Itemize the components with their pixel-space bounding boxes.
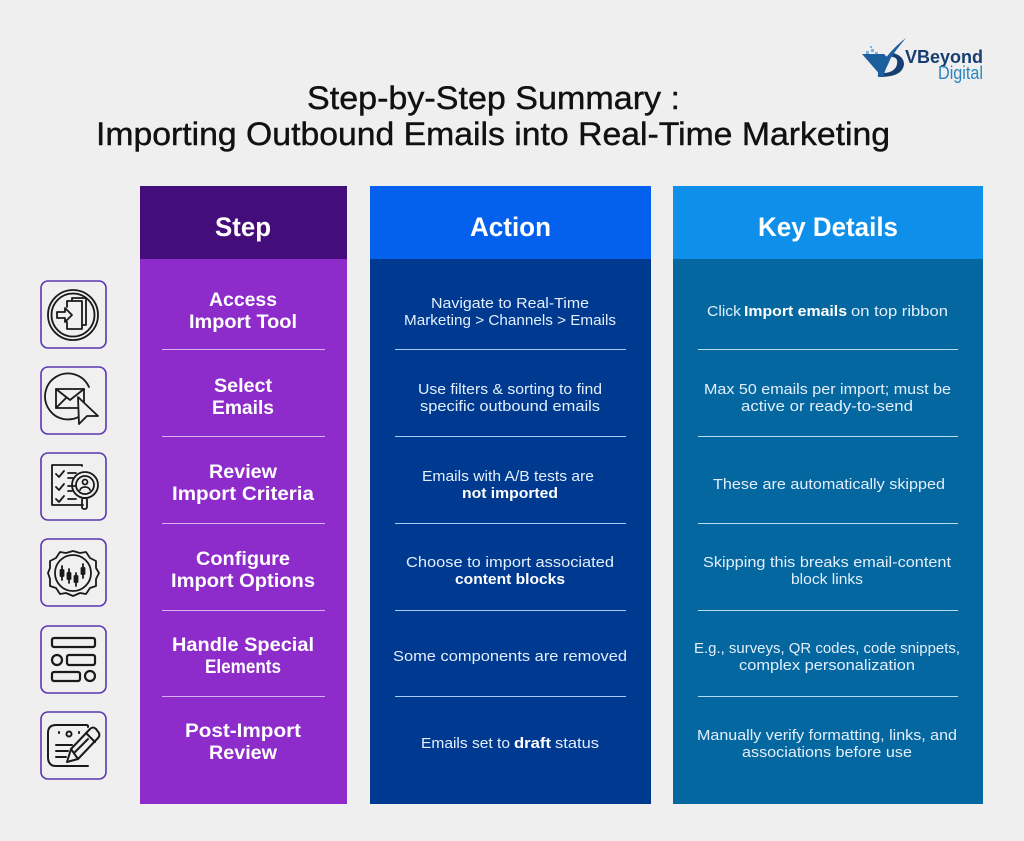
action: content blocks: content blocks [455, 571, 565, 588]
heading: step [140, 186, 347, 259]
step: post-import review: Review [209, 743, 277, 764]
heading: step: Step [215, 212, 271, 242]
detail: import emails: Import emails [744, 303, 847, 320]
action: filters [418, 381, 602, 415]
logo: VBeyond Digital: VBeyond [905, 47, 983, 67]
action: a/b tests: Emails with A/B tests are [422, 468, 594, 485]
icon: post-import note and pencil [41, 712, 106, 779]
detail: breaks links [703, 554, 952, 588]
detail: verify [697, 727, 957, 761]
step: handle special elements: Elements [205, 657, 281, 678]
panel: action column [370, 186, 651, 804]
step: review import criteria: Import Criteria [172, 484, 314, 505]
logo: VBeyond Digital: Digital [938, 63, 983, 83]
detail: import emails [707, 303, 948, 320]
detail: import emails: on top ribbon [851, 303, 948, 320]
detail: special elements: E.g., surveys, QR codes, code snippets, [694, 640, 960, 657]
logo: VBeyond Digital [862, 38, 983, 83]
step: select emails: Emails [212, 398, 274, 419]
step: post-import review: Post-Import [185, 721, 302, 742]
action: draft status: draft [514, 735, 551, 752]
icon: special elements layout [41, 626, 106, 693]
step: access import tool: Access [209, 290, 277, 311]
detail: special elements [694, 640, 960, 674]
step: access import tool: Import Tool [189, 312, 297, 333]
panel: step column [140, 186, 347, 804]
step: access import tool [189, 290, 297, 333]
action: filters: Use filters & sorting to find [418, 381, 602, 398]
detail: max 50 emails: active or ready-to-send [741, 398, 913, 415]
detail: max 50 emails: Max 50 emails per import; must be [704, 381, 951, 398]
step: configure import options: Configure [196, 549, 290, 570]
detail: breaks links: block links [791, 571, 863, 588]
icon: email cursor [41, 367, 106, 434]
action: content blocks [406, 554, 614, 588]
detail: breaks links: Skipping this breaks email-content [703, 554, 952, 571]
action: content blocks: Choose to import associated [406, 554, 614, 571]
detail: max 50 emails [704, 381, 951, 415]
step: configure import options [171, 549, 315, 592]
step: review import criteria [172, 462, 314, 505]
step: handle special elements [172, 635, 314, 678]
heading: key details [673, 186, 983, 259]
heading: key details: Key Details [758, 212, 898, 242]
action: filters: specific outbound emails [420, 398, 600, 415]
step: review import criteria: Review [209, 462, 277, 483]
detail: verify: associations before use [742, 744, 912, 761]
icon: review checklist [41, 453, 106, 520]
title [96, 80, 890, 152]
detail: import emails: Click [707, 303, 742, 320]
title: Importing Outbound Emails into Real-Time Marketing [96, 116, 890, 152]
action: draft status [421, 735, 599, 752]
action: a/b tests: not imported [462, 485, 558, 502]
heading: action [370, 186, 651, 259]
step: post-import review [185, 721, 302, 764]
action: draft status: Emails set to [421, 735, 510, 752]
action: draft status: status [555, 735, 599, 752]
action: navigate: Navigate to Real-Time [431, 295, 589, 312]
title: Step-by-Step Summary : [307, 80, 680, 116]
panel: key details column [673, 186, 983, 804]
action: navigate: Marketing > Channels > Emails [404, 312, 616, 329]
step: select emails [212, 376, 274, 419]
action: navigate [404, 295, 616, 329]
icon: configure gear [41, 539, 106, 606]
icon: import tool [41, 281, 106, 348]
step: configure import options: Import Options [171, 571, 315, 592]
detail: skipped: These are automatically skipped [713, 476, 945, 493]
heading: action: Action [470, 212, 551, 242]
detail: verify: Manually verify formatting, links, and [697, 727, 957, 744]
detail: special elements: complex personalization [739, 657, 915, 674]
step: handle special elements: Handle Special [172, 635, 314, 656]
action: a/b tests [422, 468, 594, 502]
action: components removed: Some components are removed [393, 648, 627, 665]
step: select emails: Select [214, 376, 273, 397]
